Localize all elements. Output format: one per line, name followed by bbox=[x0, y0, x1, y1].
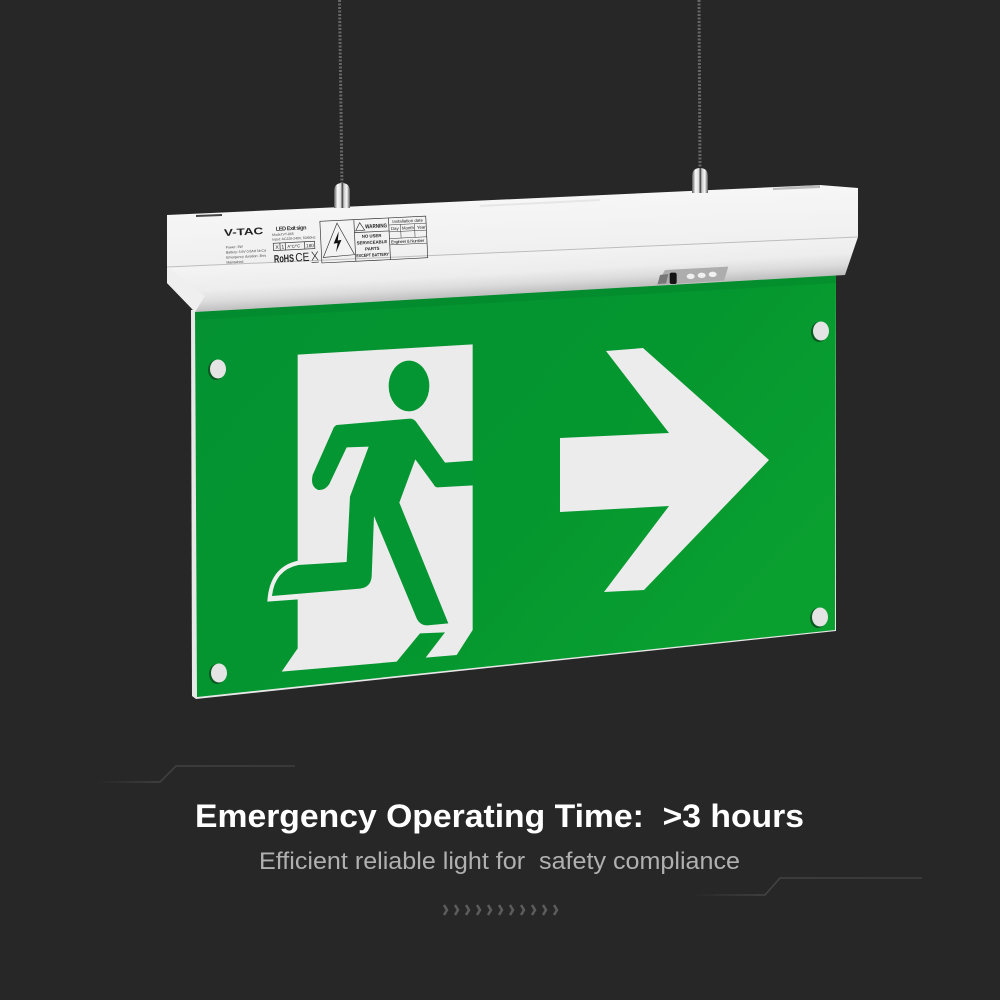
figure body bbox=[272, 419, 473, 625]
warning label: WARNING bbox=[365, 223, 388, 230]
door bbox=[282, 344, 473, 672]
brand logo: V-TAC bbox=[224, 226, 264, 239]
certification marks bbox=[274, 249, 319, 266]
mounting screws bbox=[208, 322, 829, 684]
product label bbox=[224, 216, 428, 268]
figure head bbox=[389, 361, 429, 411]
lightning bolt bbox=[333, 231, 342, 252]
certification marks: RoHS bbox=[274, 253, 294, 266]
title: Emergency Operating Time: >3 hours bbox=[195, 798, 804, 834]
warning text: NO USER bbox=[362, 233, 382, 239]
trailing foot outline bbox=[267, 561, 298, 602]
exit sign bbox=[167, 168, 858, 699]
warning text: SERVICEABLE bbox=[357, 239, 387, 246]
rating boxes: X bbox=[275, 245, 280, 251]
model title bbox=[272, 225, 316, 242]
model title: LED Exit sign bbox=[276, 225, 307, 233]
installation date table bbox=[389, 217, 427, 245]
hazard triangle bbox=[322, 222, 355, 258]
specifications: Emergency duration: 3hrs bbox=[226, 254, 266, 260]
warning label bbox=[320, 216, 428, 263]
warning text: EXCEPT BATTERY bbox=[356, 252, 389, 258]
model title: Input: AC220-240V, 50/60Hz bbox=[272, 236, 316, 242]
specifications bbox=[226, 244, 267, 265]
rating boxes bbox=[273, 241, 315, 251]
decorative circuit line left bbox=[97, 766, 295, 782]
direction arrow bbox=[560, 348, 769, 592]
certification marks: CE bbox=[295, 250, 310, 265]
warning text: PARTS bbox=[365, 246, 380, 251]
specifications: Maintained bbox=[226, 260, 244, 265]
rating boxes: 1 bbox=[281, 244, 285, 251]
decorative circuit line right bbox=[690, 878, 922, 895]
installation date table: Month bbox=[402, 225, 415, 231]
rating boxes: 180 bbox=[306, 243, 314, 248]
chevron row bbox=[444, 905, 557, 915]
specifications: Battery: 3.6V 0.6AH Ni-Cd bbox=[226, 249, 266, 255]
running man pictogram on door bbox=[267, 344, 473, 672]
white housing bbox=[167, 185, 858, 312]
installation date table: Installation date bbox=[392, 218, 424, 224]
subtitle: Efficient reliable light for safety compliance bbox=[259, 848, 740, 875]
suspension cables bbox=[340, 0, 700, 186]
rating boxes: A°C/°C bbox=[287, 243, 300, 249]
installation date table: Engineer & Number bbox=[391, 238, 425, 245]
installation date table: Day bbox=[391, 226, 400, 231]
cable clips bbox=[334, 168, 708, 208]
warning heading bbox=[355, 222, 365, 231]
specifications: Power: 3W bbox=[226, 245, 244, 250]
status indicator panel bbox=[657, 267, 728, 285]
warning text bbox=[355, 233, 389, 258]
model title: Model:VT-865 bbox=[272, 232, 294, 237]
green acrylic panel bbox=[191, 272, 836, 699]
installation date table: Year bbox=[417, 224, 426, 230]
